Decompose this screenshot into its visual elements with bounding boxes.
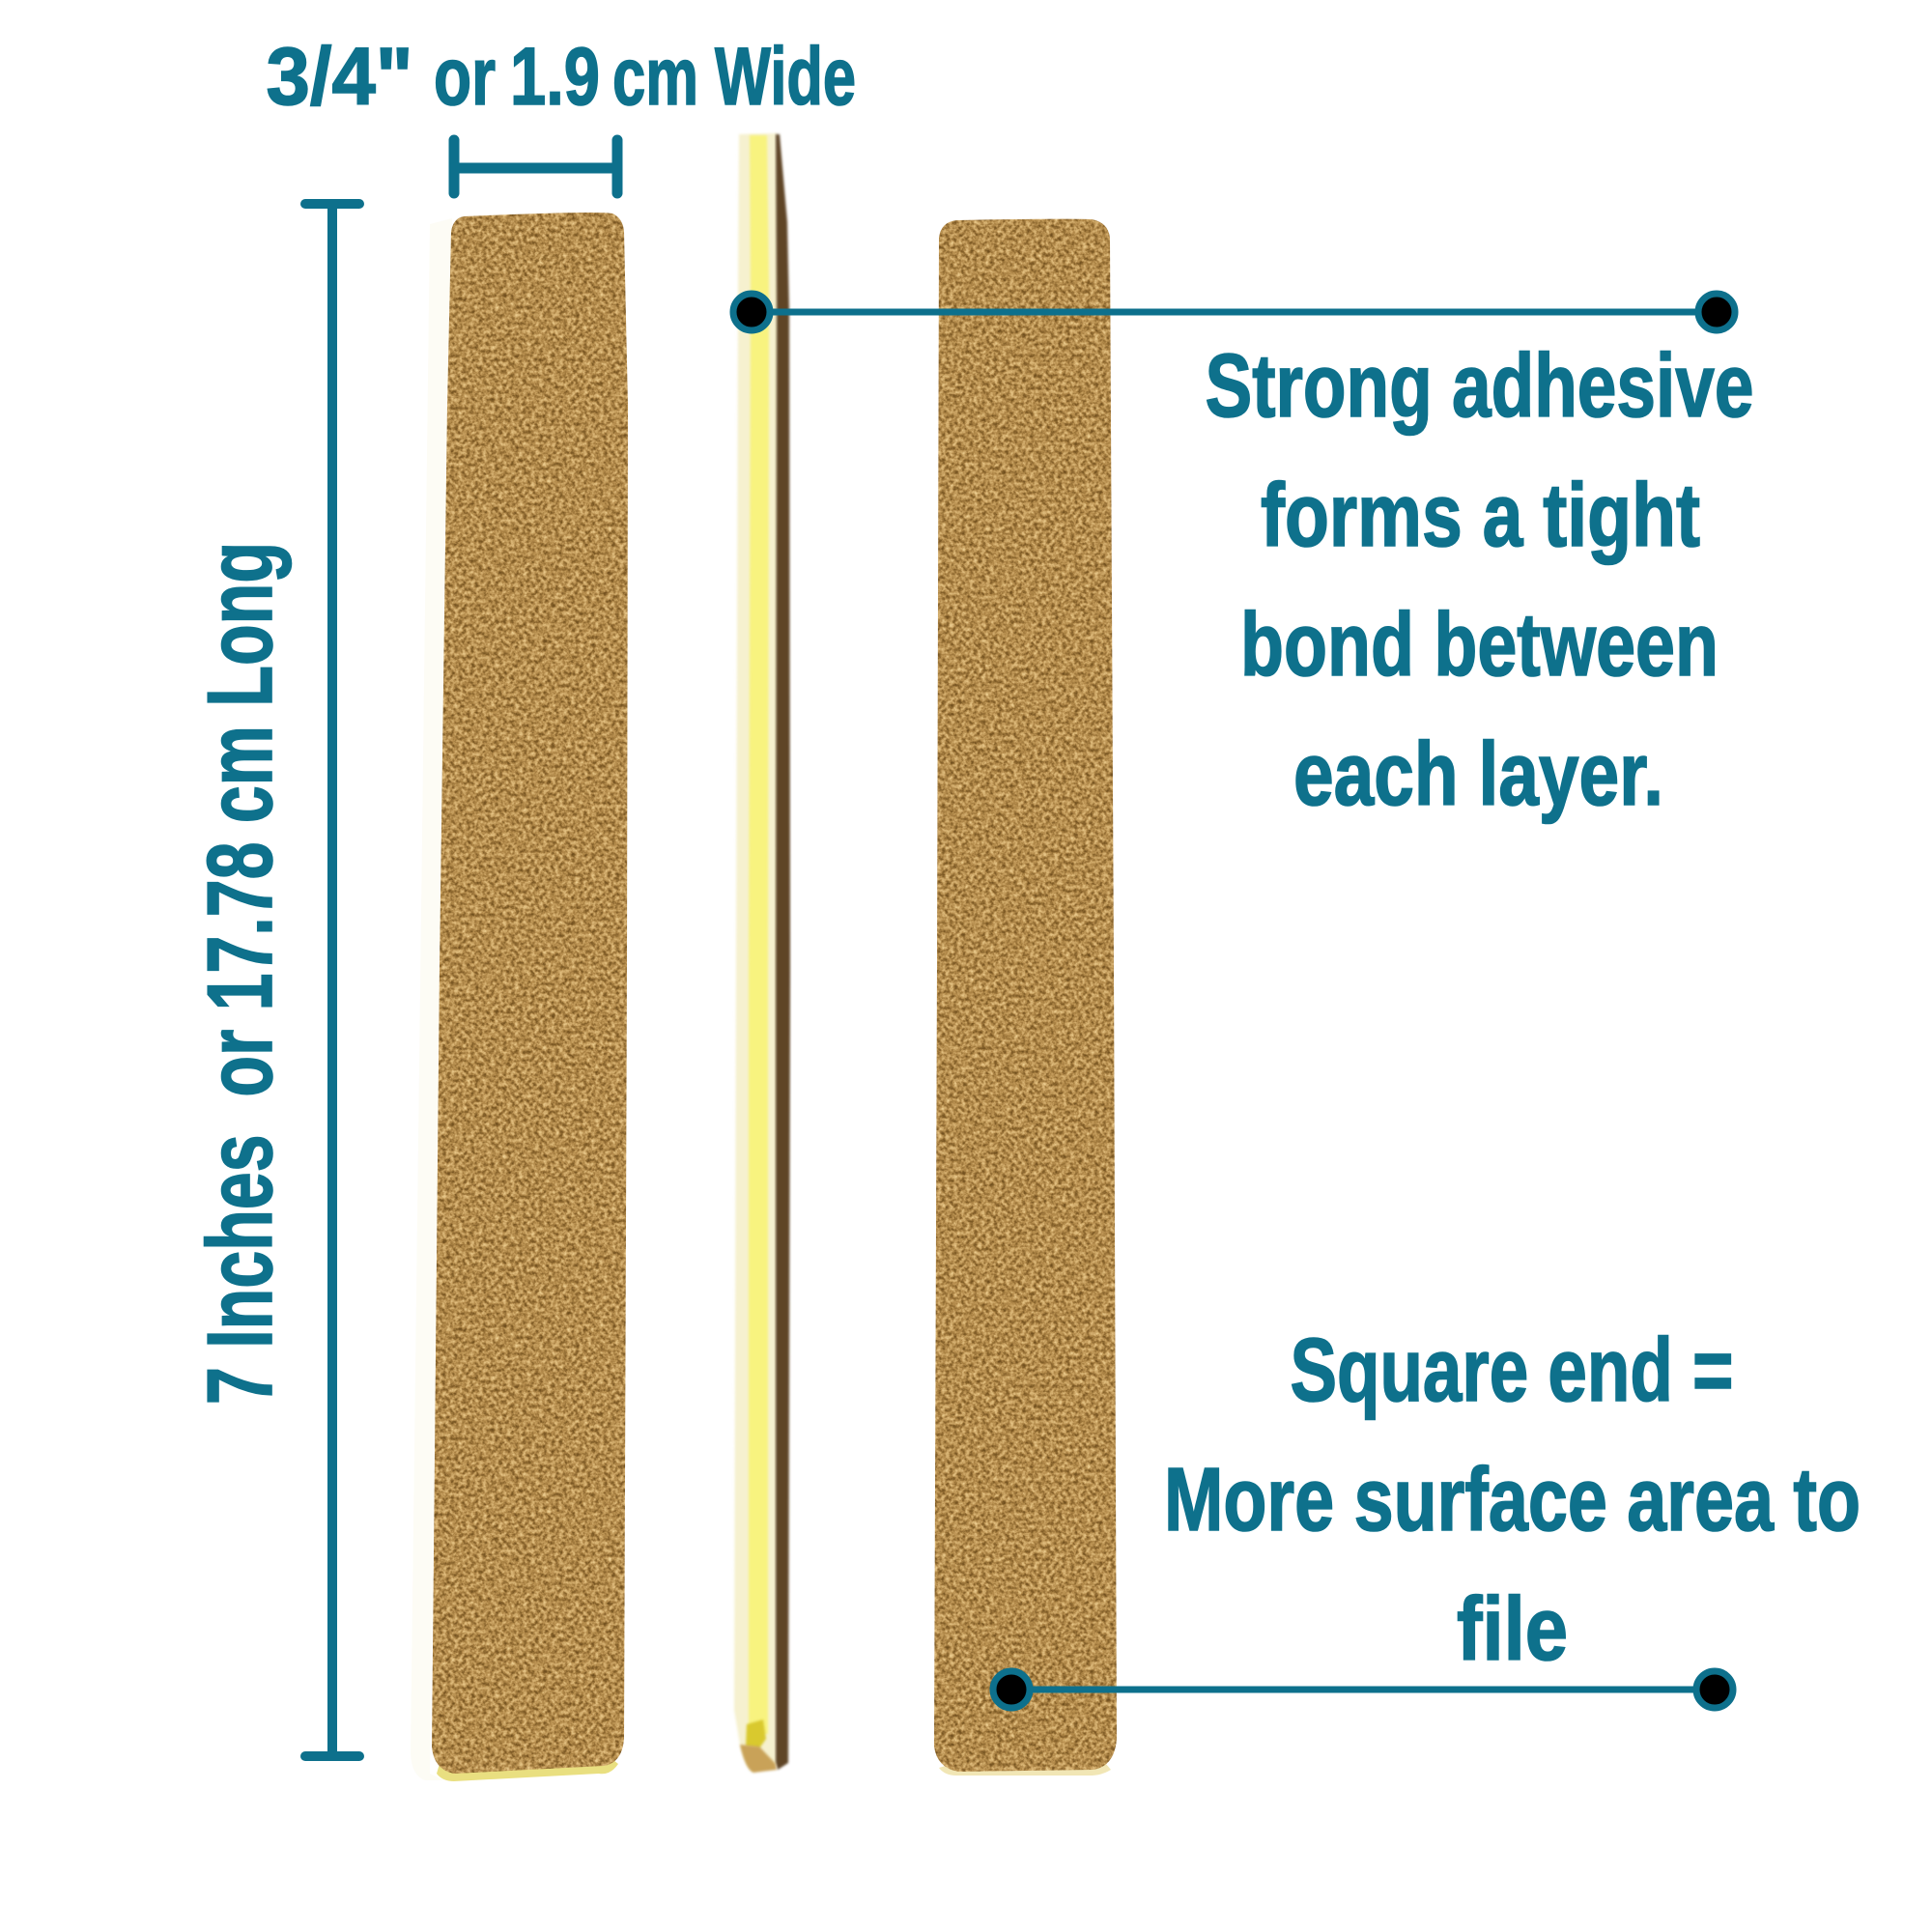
callout text: adhesive: forms a tight [1261, 465, 1700, 565]
width heading: or [434, 31, 496, 122]
yellow end blob [746, 1719, 766, 1748]
callout text: square end [1164, 1320, 1861, 1679]
brown abrasive layer [776, 134, 790, 1770]
marker: square end dot [993, 1671, 1030, 1708]
cream foam layer [734, 133, 779, 1772]
callout text: square end: file [1457, 1578, 1568, 1679]
callout text: adhesive [1206, 335, 1754, 824]
middle sanding strip, side view showing layers [734, 133, 790, 1773]
callout text: adhesive: bond between [1240, 594, 1719, 695]
left sanding strip, front view [411, 213, 628, 1781]
callout text: adhesive: each layer. [1293, 724, 1663, 824]
callout text: square end: Square end = [1291, 1320, 1733, 1420]
width dimension bracket [454, 140, 617, 193]
width heading: cm [612, 31, 698, 122]
yellow core layer [749, 135, 769, 1734]
callout text: adhesive: Strong adhesive [1206, 335, 1754, 436]
callout leader: square end [993, 1671, 1733, 1708]
right sanding strip, front view [934, 219, 1117, 1776]
length label: 7 Inches or 17.78 cm Long [188, 542, 292, 1405]
tan tip [740, 1745, 777, 1773]
width heading: Wide [715, 31, 856, 122]
width heading [267, 31, 856, 122]
width heading: 3/4" [267, 31, 413, 122]
callout leader: adhesive [733, 294, 1735, 330]
marker: adhesive layer dot [733, 294, 770, 330]
length dimension bracket [305, 204, 359, 1756]
width heading: 1.9 [510, 31, 600, 122]
